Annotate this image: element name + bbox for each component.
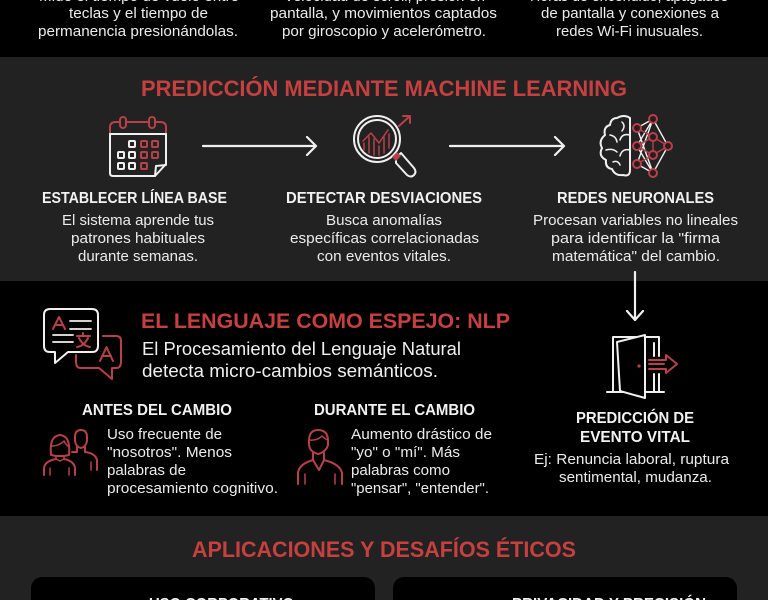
text: durante: "pensar", "entender". [351, 480, 489, 497]
text: touch and motion: por giroscopio y acelerómetro. [282, 23, 486, 40]
step: redes neuronales [533, 190, 738, 265]
icon: brain and neural network [601, 115, 672, 177]
step: establecer línea base [42, 188, 227, 265]
text: antes [107, 426, 278, 497]
text: screen and wifi: redes Wi-Fi inusuales. [556, 23, 703, 40]
icon: open door with arrow [607, 335, 677, 398]
icon: translation speech bubbles [44, 309, 121, 379]
text: screen and wifi [530, 0, 728, 40]
card: uso corporativo [31, 577, 375, 600]
step: redes neuronales: para identificar la "firma [551, 230, 721, 247]
card: privacidad y precisión [393, 577, 737, 600]
heading: machine learning: PREDICCIÓN MEDIANTE MACHINE LEARNING [141, 76, 627, 101]
text: NLP intro: El Procesamiento del Lenguaje Natural [142, 339, 461, 359]
icon: calendar [110, 117, 166, 176]
panel: predicción de evento vital: Ej: Renuncia laboral, ruptura [534, 451, 730, 468]
step: redes neuronales: REDES NEURONALES [557, 190, 714, 207]
text: keystroke timing [38, 0, 239, 40]
step: establecer línea base: patrones habituales [71, 230, 205, 247]
step: redes neuronales: Procesan variables no lineales [533, 212, 738, 229]
step: establecer línea base: El sistema aprende tus [62, 212, 214, 229]
text: durante: Aumento drástico de [351, 426, 492, 443]
text: NLP intro: detecta micro-cambios semánticos. [142, 361, 438, 381]
text: durante: palabras como [351, 462, 450, 479]
text: touch and motion [270, 0, 497, 40]
icon: magnifier with chart [354, 116, 416, 176]
panel: durante el cambio [298, 402, 492, 497]
text: touch and motion: pantalla, y movimientos captados [270, 5, 497, 22]
icon: two people [44, 430, 97, 475]
step: establecer línea base: ESTABLECER LÍNEA BASE [42, 188, 227, 207]
text: keystroke timing: permanencia presionándolas. [38, 23, 238, 40]
text: antes: "nosotros". Menos [107, 444, 232, 461]
text: antes: palabras de [107, 462, 186, 479]
step: detectar desviaciones: con eventos vitales. [317, 248, 451, 265]
text: NLP intro [142, 339, 461, 381]
heading: aplicaciones: APLICACIONES Y DESAFÍOS ÉTICOS [192, 537, 576, 562]
step: detectar desviaciones [286, 190, 482, 265]
step: redes neuronales: matemática" del cambio. [552, 248, 720, 265]
heading: durante el cambio: DURANTE EL CAMBIO [314, 402, 475, 419]
text: durante [351, 426, 492, 497]
panel: top data collection columns [38, 0, 728, 40]
step: detectar desviaciones: DETECTAR DESVIACIONES [286, 190, 482, 207]
step: detectar desviaciones: específicas correlacionadas [290, 230, 479, 247]
step: detectar desviaciones: Busca anomalías [326, 212, 442, 229]
panel: predicción de evento vital: sentimental, mudanza. [559, 469, 712, 486]
icon: single person [298, 430, 342, 484]
panel: predicción de evento vital: EVENTO VITAL [580, 429, 690, 446]
panel: antes del cambio [44, 402, 278, 497]
arrow: down to life event [627, 272, 643, 320]
text: keystroke timing: teclas y el tiempo de [69, 5, 208, 22]
panel: predicción de evento vital [534, 408, 730, 486]
text: antes: procesamiento cognitivo. [107, 480, 278, 497]
heading: antes del cambio: ANTES DEL CAMBIO [82, 402, 232, 419]
step: establecer línea base: durante semanas. [78, 248, 198, 265]
heading: NLP: EL LENGUAJE COMO ESPEJO: NLP [141, 310, 510, 333]
text: screen and wifi: de pantalla y conexiones a [541, 5, 720, 22]
panel: predicción de evento vital: PREDICCIÓN DE [576, 408, 694, 427]
text: antes: Uso frecuente de [107, 426, 222, 443]
text: durante: "yo" o "mí". Más [351, 444, 460, 461]
arrow: deviations to neural networks [450, 137, 564, 155]
arrow: baseline to deviations [203, 137, 316, 155]
